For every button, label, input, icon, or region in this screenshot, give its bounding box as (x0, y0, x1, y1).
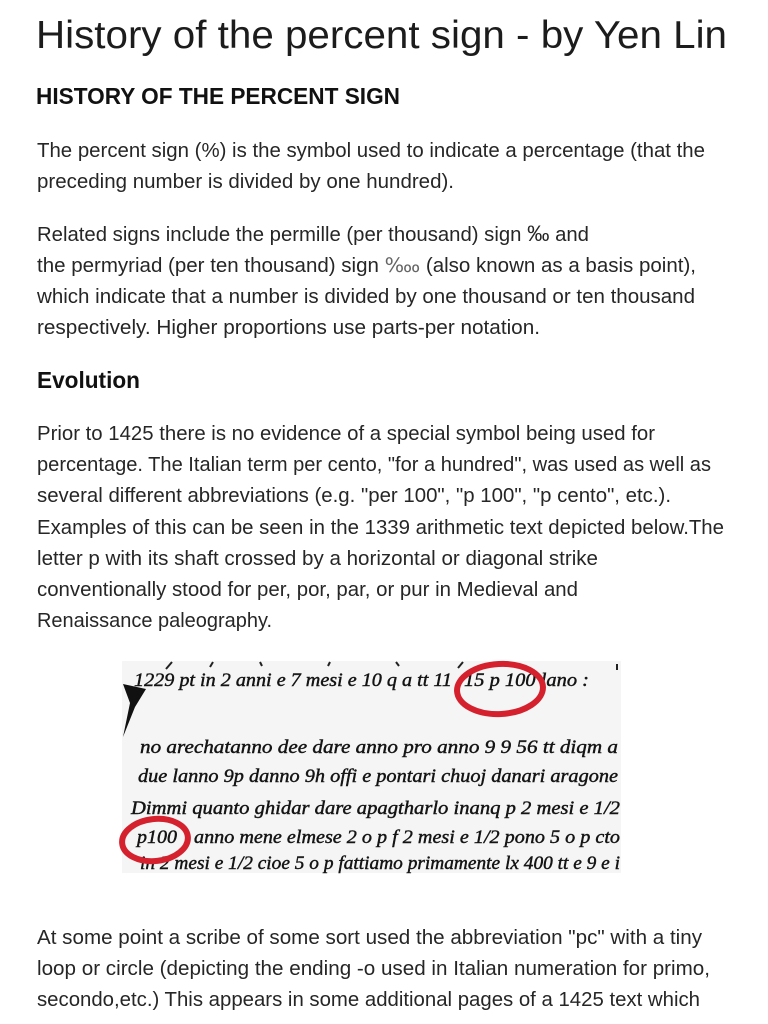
text block: evolution paragraph (37, 423, 724, 632)
text block: scribe paragraph: At some point a scribe of some sort used the abbreviation "pc" with a tiny (37, 927, 702, 949)
text block: definition paragraph: preceding number is divided by one hundred). (37, 171, 454, 193)
text block: related signs paragraph: the permyriad (per ten thousand) sign ‱ (also known as a basis point), (37, 255, 696, 277)
text block: related signs paragraph (36, 221, 696, 339)
manuscript handwriting: due lanno 9p danno 9h offi e pontari chuoj danari aragone (138, 766, 618, 787)
text block: evolution paragraph: Examples of this can be seen in the 1339 arithmetic text depicted below.The (37, 517, 724, 539)
text block: evolution paragraph: letter p with its shaft crossed by a horizontal or diagonal strike (37, 548, 598, 570)
heading: history of the percent sign: HISTORY OF THE PERCENT SIGN (36, 83, 400, 109)
manuscript handwriting: p100 (135, 827, 178, 848)
title: History of the percent sign - by Yen Lin (36, 14, 727, 57)
text block: definition paragraph (37, 140, 705, 193)
manuscript handwriting: no arechatanno dee dare anno pro anno 9 9 56 tt diqm a (140, 737, 618, 758)
text block: evolution paragraph: percentage. The Italian term per cento, "for a hundred", was used as well as (37, 454, 711, 476)
text block: scribe paragraph: secondo,etc.) This appears in some additional pages of a 1425 text which (37, 989, 700, 1011)
text block: definition paragraph: The percent sign (%) is the symbol used to indicate a percentage (that the (37, 140, 705, 162)
red circle: upper p 100 (456, 662, 544, 716)
text block: related signs paragraph: which indicate that a number is divided by one thousand or ten thousand (36, 286, 695, 308)
manuscript handwriting: 1229 pt in 2 anni e 7 mesi e 10 q a tt 11 (134, 670, 452, 691)
manuscript handwriting (130, 670, 621, 874)
text block: evolution paragraph: conventionally stood for per, por, par, or pur in Medieval and (37, 579, 578, 601)
manuscript handwriting: anno mene elmese 2 o p f 2 mesi e 1/2 pono 5 o p cto (194, 827, 620, 848)
heading: evolution: Evolution (37, 367, 140, 393)
red circle: lower p 100 (120, 816, 190, 864)
text block: evolution paragraph: Renaissance paleography. (37, 610, 272, 632)
text block: related signs paragraph: respectively. Higher proportions use parts-per notation. (37, 317, 540, 339)
manuscript handwriting: Dimmi quanto ghidar dare apagtharlo inanq p 2 mesi e 1/2 (130, 798, 621, 819)
text block: scribe paragraph: loop or circle (depicting the ending -o used in Italian numeration for primo, (37, 958, 710, 980)
manuscript stray strokes along top edge (166, 662, 617, 670)
text block: evolution paragraph: several different abbreviations (e.g. "per 100", "p 100", "p cento", etc.). (37, 485, 671, 507)
text block: evolution paragraph: Prior to 1425 there is no evidence of a special symbol being used for (37, 423, 655, 445)
manuscript image: 1339 arithmetic text (120, 661, 621, 874)
text block: related signs paragraph: Related signs include the permille (per thousand) sign ‰ and (37, 221, 589, 246)
text block: scribe paragraph (37, 927, 710, 1011)
manuscript pen flourish (123, 684, 146, 737)
manuscript handwriting: in 2 mesi e 1/2 cioe 5 o p fattiamo primamente lx 400 tt e 9 e i (140, 853, 620, 874)
manuscript handwriting: 15 p 100 lano : (464, 670, 589, 691)
